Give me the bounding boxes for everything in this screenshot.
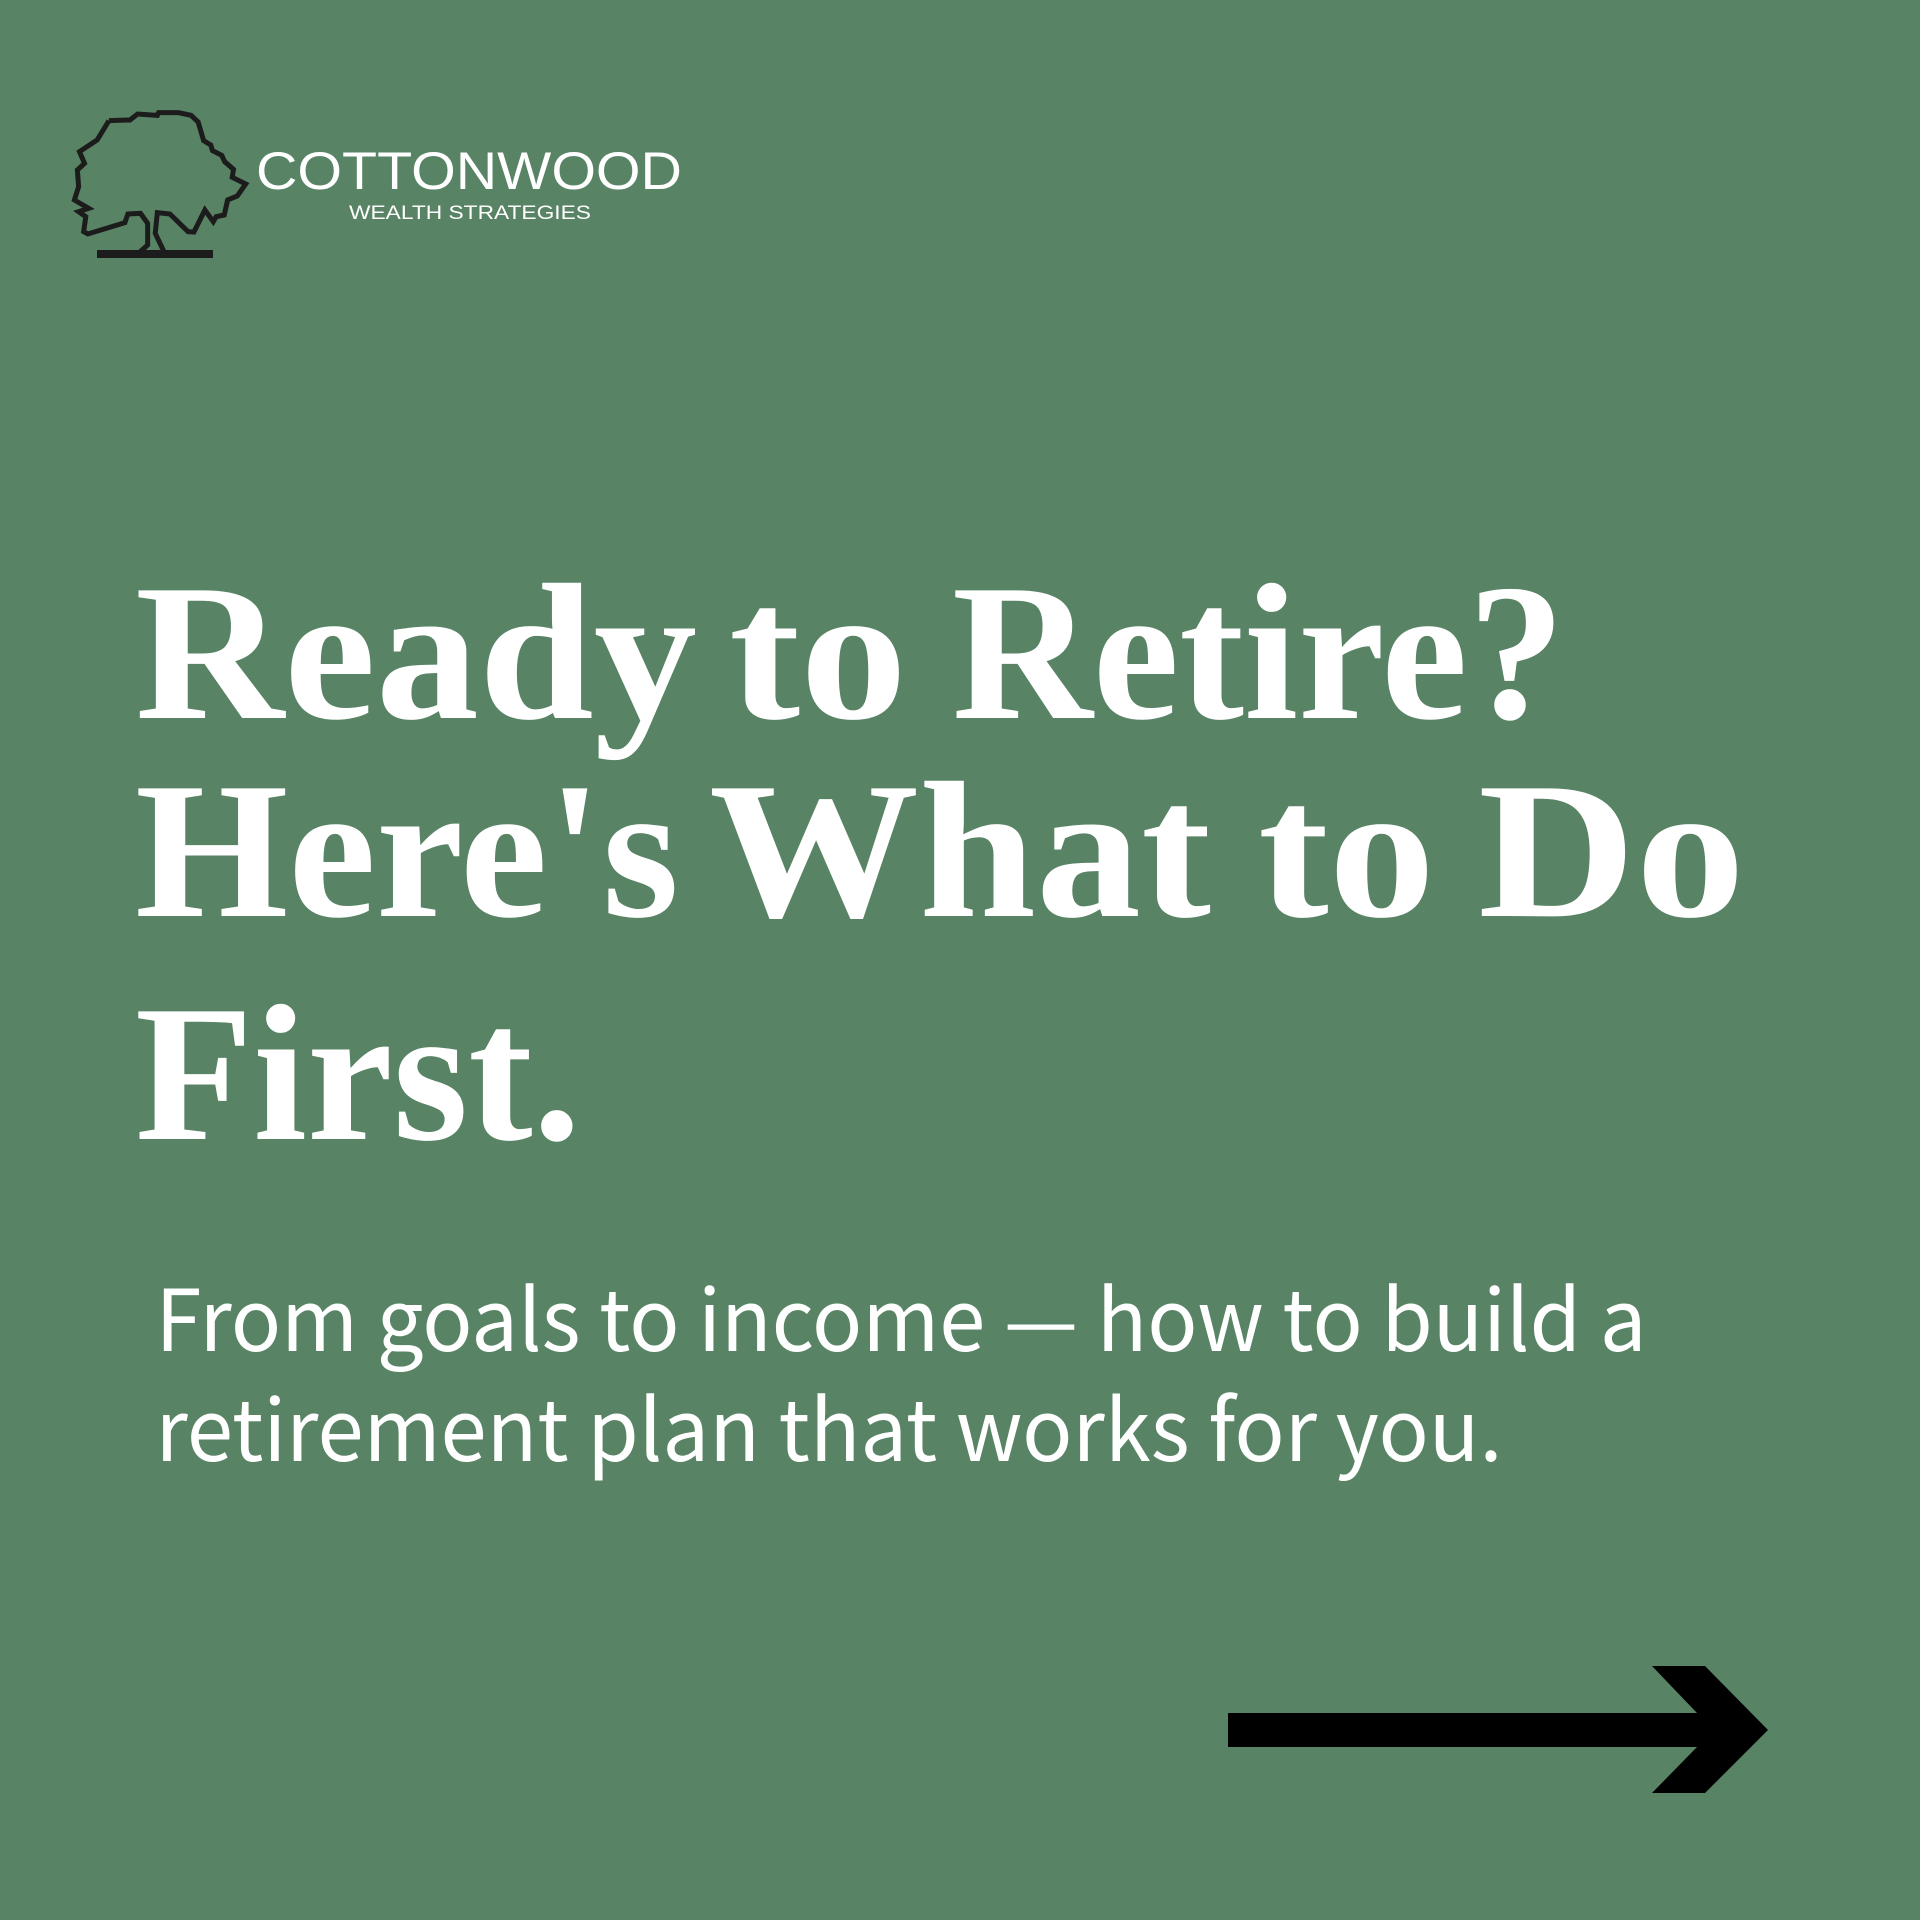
logo wordmark: COTTONWOOD: [256, 142, 682, 201]
subtitle: retirement plan that works for you.: [156, 1363, 1502, 1486]
logo tagline: WEALTH STRATEGIES: [349, 202, 591, 224]
title: to: [1258, 743, 1435, 959]
title: Retire?: [952, 545, 1565, 761]
title: First.: [135, 966, 581, 1182]
title: What: [709, 743, 1211, 959]
subtitle: From goals to income — how to build a: [156, 1253, 1646, 1376]
title: Do: [1478, 743, 1745, 959]
title: to: [729, 545, 907, 761]
logo: Cottonwood Wealth Strategies: [74, 113, 682, 258]
icon: tree outline: [74, 113, 246, 258]
title: [135, 545, 1745, 1182]
title: Here's: [135, 743, 679, 959]
title: Ready: [135, 545, 697, 761]
arrow pointing right: [1228, 1666, 1768, 1793]
subtitle: [156, 1253, 1646, 1486]
